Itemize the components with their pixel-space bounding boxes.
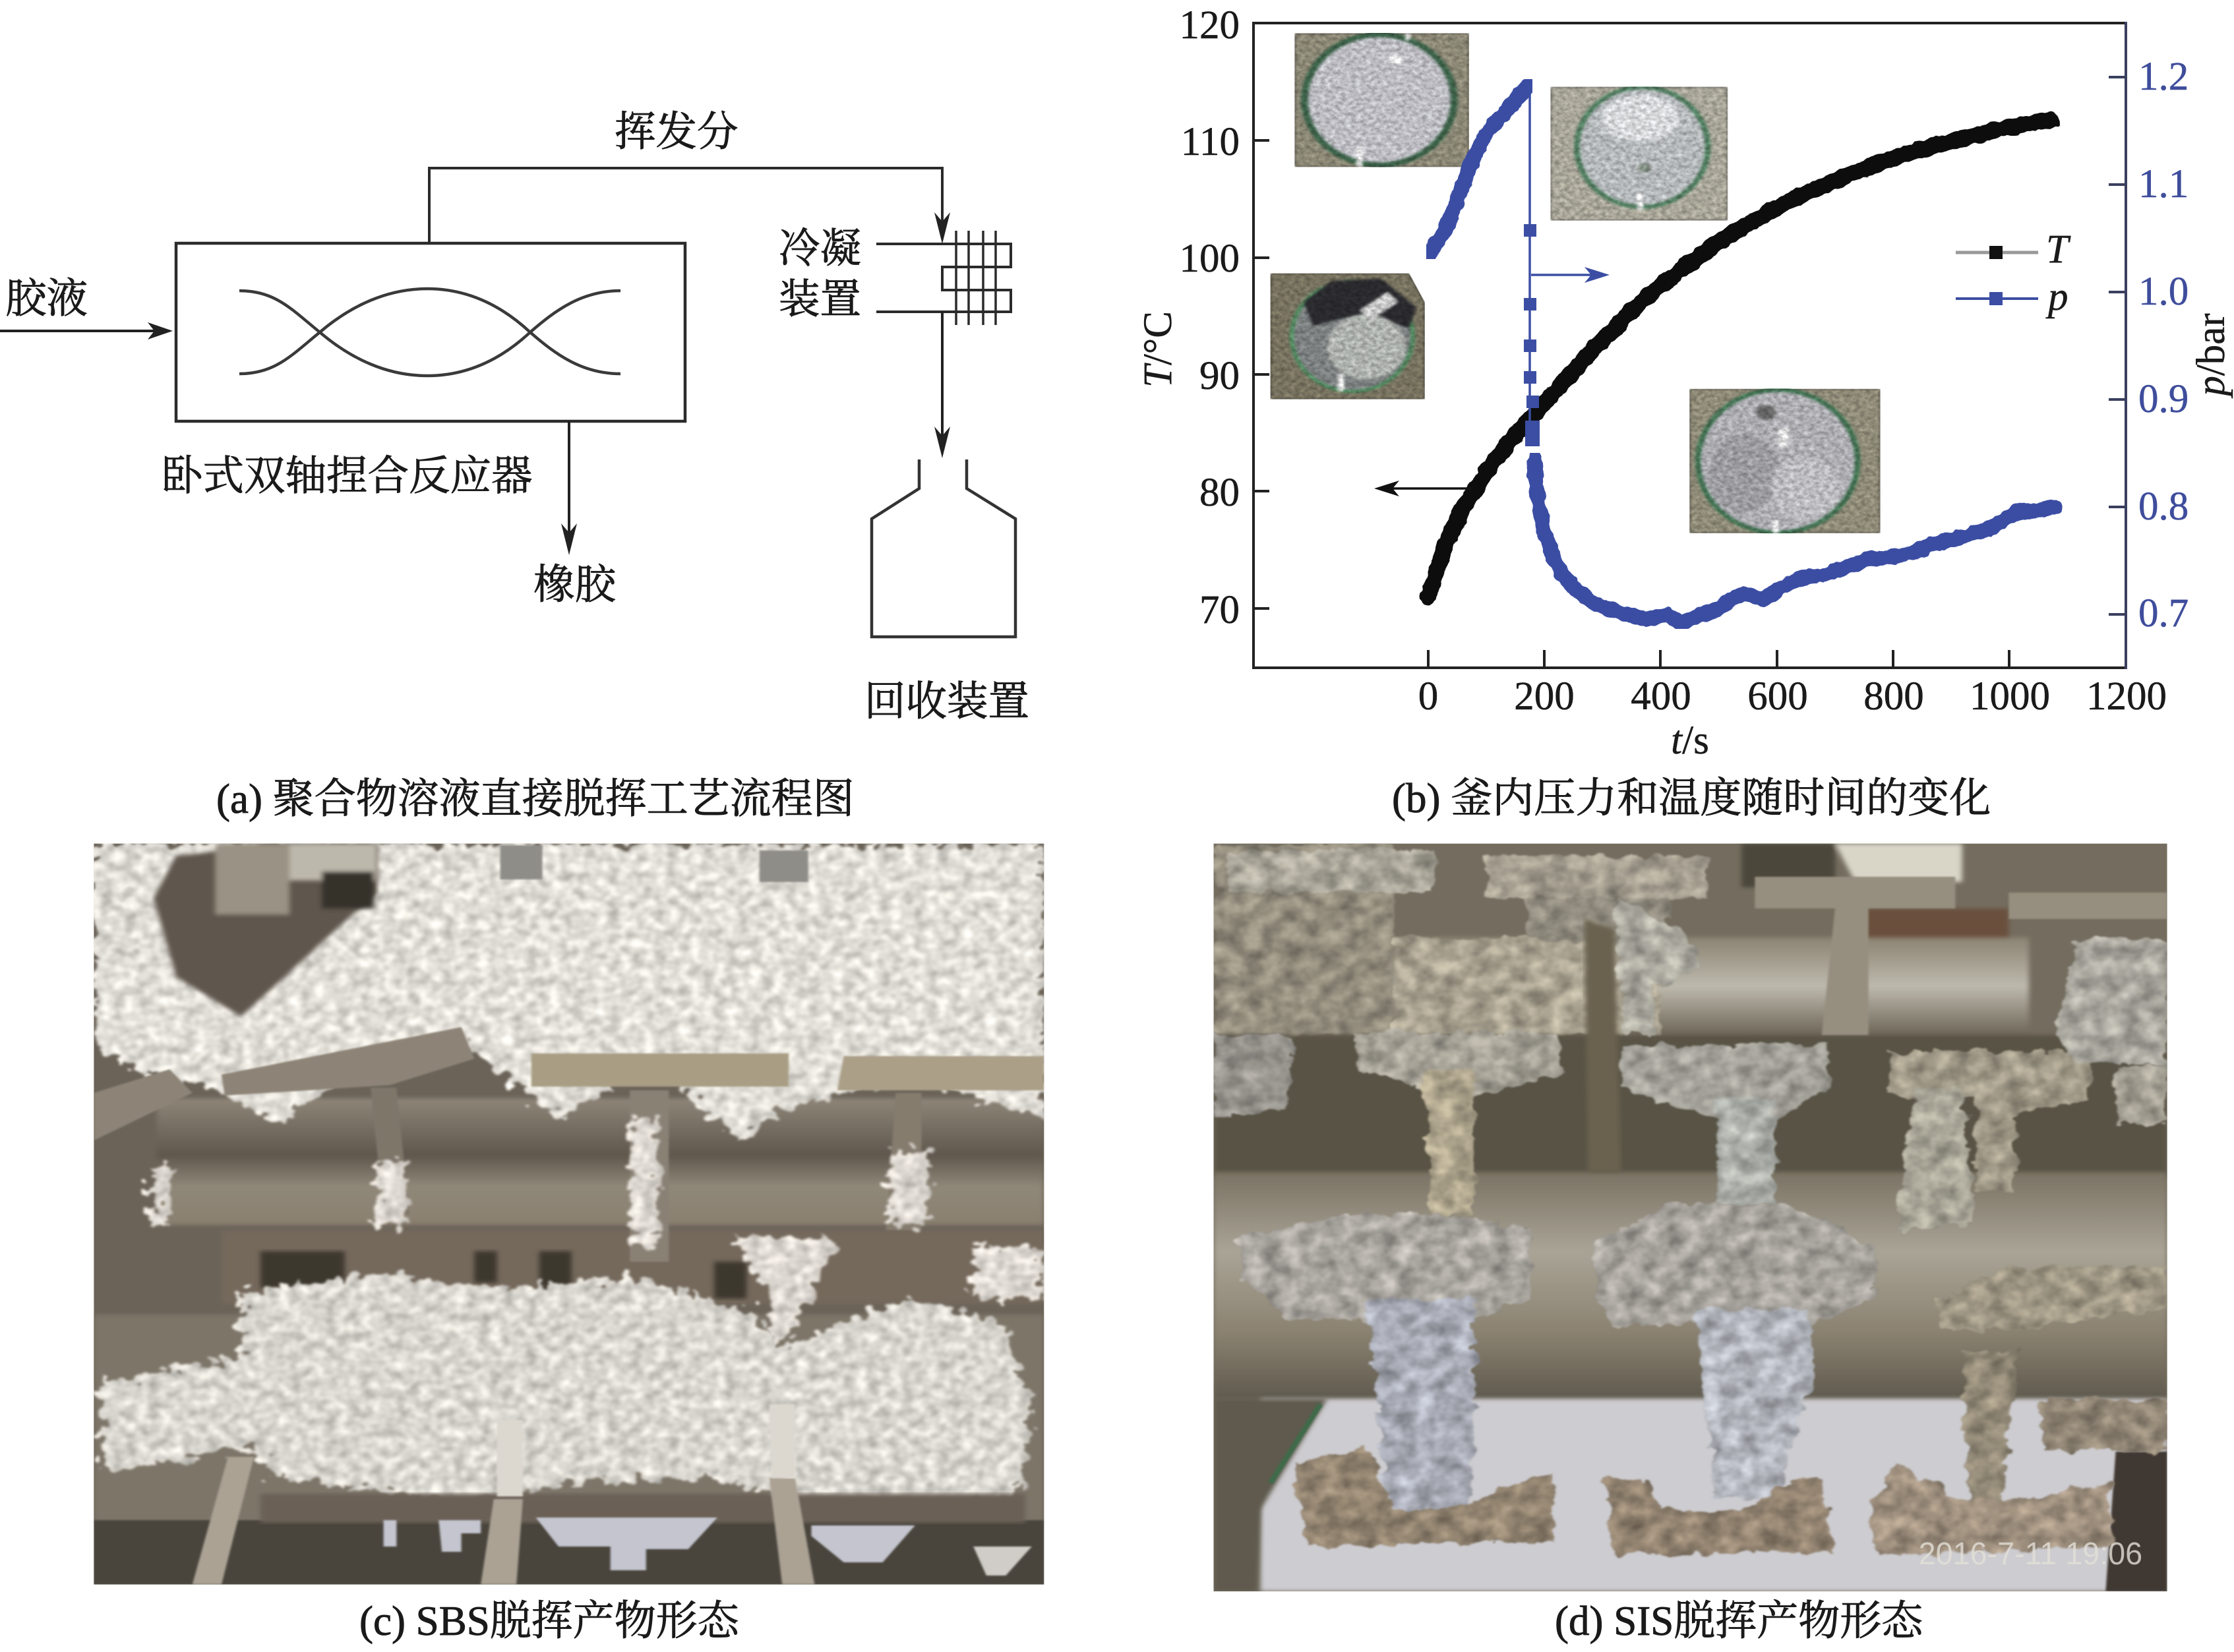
axis ticks xyxy=(1253,140,2009,668)
lower paddles xyxy=(1240,1204,2167,1554)
bottom axis numbers: 1200 xyxy=(2086,674,2167,719)
condenser xyxy=(876,231,1011,325)
pressure curve xyxy=(1430,84,2055,624)
label: condenser: 装置 xyxy=(779,276,861,322)
label: feed: 胶液 xyxy=(5,276,88,322)
upper shaft xyxy=(157,1098,1044,1225)
legend: p xyxy=(2045,275,2068,319)
lower band xyxy=(260,1494,1025,1523)
right axis xyxy=(2109,22,2126,669)
reactor box xyxy=(176,243,685,421)
recovery bottle xyxy=(872,459,1015,637)
upper left shaft end xyxy=(1214,844,1394,1035)
dark hole upper left xyxy=(154,844,377,1017)
bottom axis numbers: 1000 xyxy=(1970,674,2050,719)
axis title: time: t/s xyxy=(1671,719,1709,763)
grey plate upper left xyxy=(215,844,377,915)
lower shaft xyxy=(94,1314,1044,1525)
feed arrow xyxy=(0,322,173,339)
left axis numbers: 110 xyxy=(1181,120,1240,164)
bottom axis numbers: 600 xyxy=(1747,674,1808,719)
inset photo: before xyxy=(1294,33,1469,167)
upper shaft xyxy=(1394,937,2029,1035)
caption c: (c) SBS脱挥产物形态 xyxy=(359,1598,740,1644)
upper white flakes xyxy=(94,844,1044,1140)
axis title: temperature: T/°C xyxy=(1136,311,1180,388)
inset photos xyxy=(1270,33,1881,533)
glassy stem upper xyxy=(1615,898,1701,1035)
bottom axis numbers xyxy=(1418,674,2167,719)
bottom dark mechanics xyxy=(94,1520,1044,1585)
label: condenser: 冷凝 xyxy=(779,225,861,272)
pressure drop markers xyxy=(1524,224,1539,408)
bottom axis numbers: 400 xyxy=(1631,674,1691,719)
right axis numbers: 0.7 xyxy=(2138,591,2189,635)
light floor pieces xyxy=(384,1518,1032,1576)
right axis numbers xyxy=(2138,55,2189,635)
lower shaft xyxy=(1214,1172,2167,1399)
panel d: SIS product photo xyxy=(1214,844,2167,1591)
dark stem xyxy=(1585,919,1621,1172)
stem flakes xyxy=(150,1119,1044,1346)
axis title: pressure: p/bar xyxy=(2189,313,2233,399)
panel c: SBS product photo xyxy=(94,844,1044,1585)
label: reactor: 卧式双轴捏合反应器 xyxy=(162,453,533,499)
left axis numbers: 100 xyxy=(1179,237,1240,281)
dark middle band xyxy=(1214,1035,2167,1177)
inset photo: flash xyxy=(1270,273,1425,399)
left axis numbers xyxy=(1179,3,1240,632)
caption b: (b) 釜内压力和温度随时间的变化 xyxy=(1392,775,1991,821)
top bars xyxy=(1227,850,1708,940)
arrow: pressure axis xyxy=(1531,267,1610,283)
volatiles pipe arrow xyxy=(429,168,950,244)
flake edge upper left xyxy=(94,844,157,961)
textured shaft part xyxy=(1394,937,1662,1035)
bottom axis numbers: 800 xyxy=(1863,674,1924,719)
green cable xyxy=(1271,1404,1321,1483)
bottom axis numbers: 0 xyxy=(1418,674,1438,719)
lower white flakes xyxy=(98,1272,1032,1510)
bottom axis numbers: 200 xyxy=(1514,674,1575,719)
panel b: pressure and temperature chart xyxy=(1136,3,2233,763)
twin shaft curves xyxy=(239,289,620,376)
label: rubber: 橡胶 xyxy=(533,562,617,608)
axes frame xyxy=(1253,23,2126,668)
lower blocks xyxy=(222,1230,1044,1304)
caption d: (d) SIS脱挥产物形态 xyxy=(1555,1598,1924,1644)
panel a: process flow diagram xyxy=(0,109,1029,724)
inset photo: dried crumbs xyxy=(1689,389,1881,533)
legend xyxy=(1956,227,2071,319)
left axis numbers: 80 xyxy=(1199,471,1240,515)
diagonal arms xyxy=(193,1457,814,1585)
dark left floor xyxy=(1214,1399,1327,1591)
legend: T xyxy=(2046,227,2071,272)
dark corner xyxy=(2105,1452,2167,1591)
left axis numbers: 70 xyxy=(1199,588,1240,632)
upper T row xyxy=(1214,940,2167,1230)
label: condenser xyxy=(779,225,861,322)
rubber arrow xyxy=(561,421,577,555)
floor xyxy=(1260,1399,2167,1591)
temperature curve xyxy=(1428,120,2052,597)
left axis numbers: 90 xyxy=(1199,354,1240,398)
caption a: (a) 聚合物溶液直接脱挥工艺流程图 xyxy=(216,776,855,822)
right axis numbers: 1.0 xyxy=(2138,270,2189,314)
top background xyxy=(1741,844,2008,951)
top clips xyxy=(500,845,808,882)
right axis numbers: 1.2 xyxy=(2138,55,2189,99)
dark block details xyxy=(260,1251,746,1299)
right axis numbers: 1.1 xyxy=(2138,162,2189,206)
right axis numbers: 0.8 xyxy=(2138,485,2189,529)
timestamp: 2016-7-11 19:06 xyxy=(1919,1535,2142,1572)
base xyxy=(1214,844,2167,1591)
arrow to recovery xyxy=(934,312,950,458)
inset photo: foaming xyxy=(1550,87,1728,221)
right axis numbers: 0.9 xyxy=(2138,377,2189,421)
label: recovery unit: 回收装置 xyxy=(864,678,1029,724)
label: volatiles: 挥发分 xyxy=(615,109,739,155)
left axis numbers: 120 xyxy=(1179,3,1240,47)
arrow: temperature axis xyxy=(1374,481,1472,496)
paddle bars xyxy=(94,1027,1044,1262)
base xyxy=(94,844,1044,1585)
